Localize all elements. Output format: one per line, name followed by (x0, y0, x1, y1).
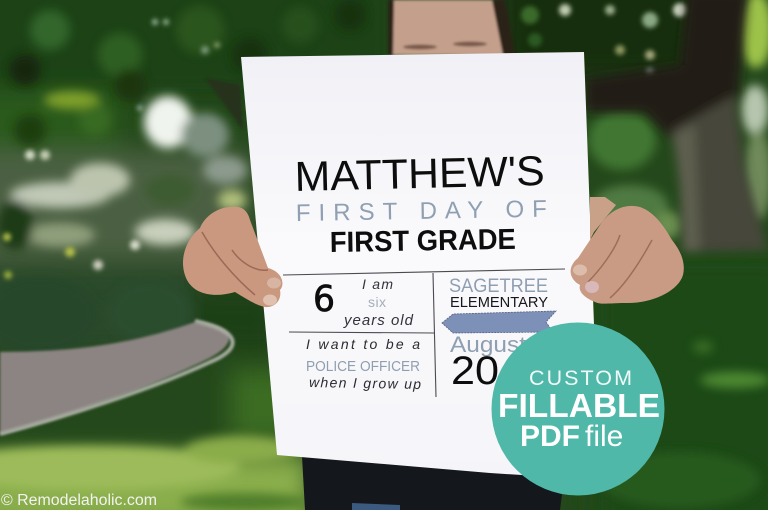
right hand (571, 197, 684, 304)
boy's hands (183, 197, 684, 307)
boy's shirt (302, 456, 565, 510)
badge line: custom: CUSTOM (529, 366, 632, 390)
school name: SAGETREE (449, 276, 548, 297)
age number: 6 (313, 279, 335, 320)
tree trunk (585, 0, 768, 252)
age text: I am (362, 276, 393, 292)
age panel (313, 276, 414, 329)
age panel: years old (343, 312, 414, 329)
gravel path with curb (0, 322, 229, 434)
foliage speckles (3, 3, 687, 279)
photo credit: © Remodelaholic.com (1, 492, 157, 509)
career panel (306, 336, 421, 392)
title: name: MATTHEW'S (294, 147, 545, 200)
school panel: ELEMENTARY (450, 294, 548, 311)
subtitle: first day of: FIRST DAY OF (296, 196, 547, 227)
age panel: six (368, 294, 386, 310)
career panel: POLICE OFFICER (306, 358, 420, 375)
badge line: fillable: FILLABLE (498, 387, 660, 424)
career panel: when I grow up (309, 374, 421, 392)
heading: first grade: FIRST GRADE (330, 224, 516, 259)
date panel (450, 332, 526, 393)
school panel (449, 276, 548, 311)
month: August (450, 332, 526, 357)
badge: custom fillable PDF file (492, 322, 664, 496)
left hand (183, 207, 282, 307)
career text: I want to be a (306, 336, 420, 352)
dividing lines (283, 269, 565, 397)
sign title group (294, 147, 547, 259)
year: 20 (451, 349, 499, 393)
ribbon arrow (442, 311, 556, 333)
paper sign (241, 52, 600, 480)
boy's face behind sign (388, 0, 515, 55)
badge line: PDF file: PDFfile (520, 420, 623, 453)
